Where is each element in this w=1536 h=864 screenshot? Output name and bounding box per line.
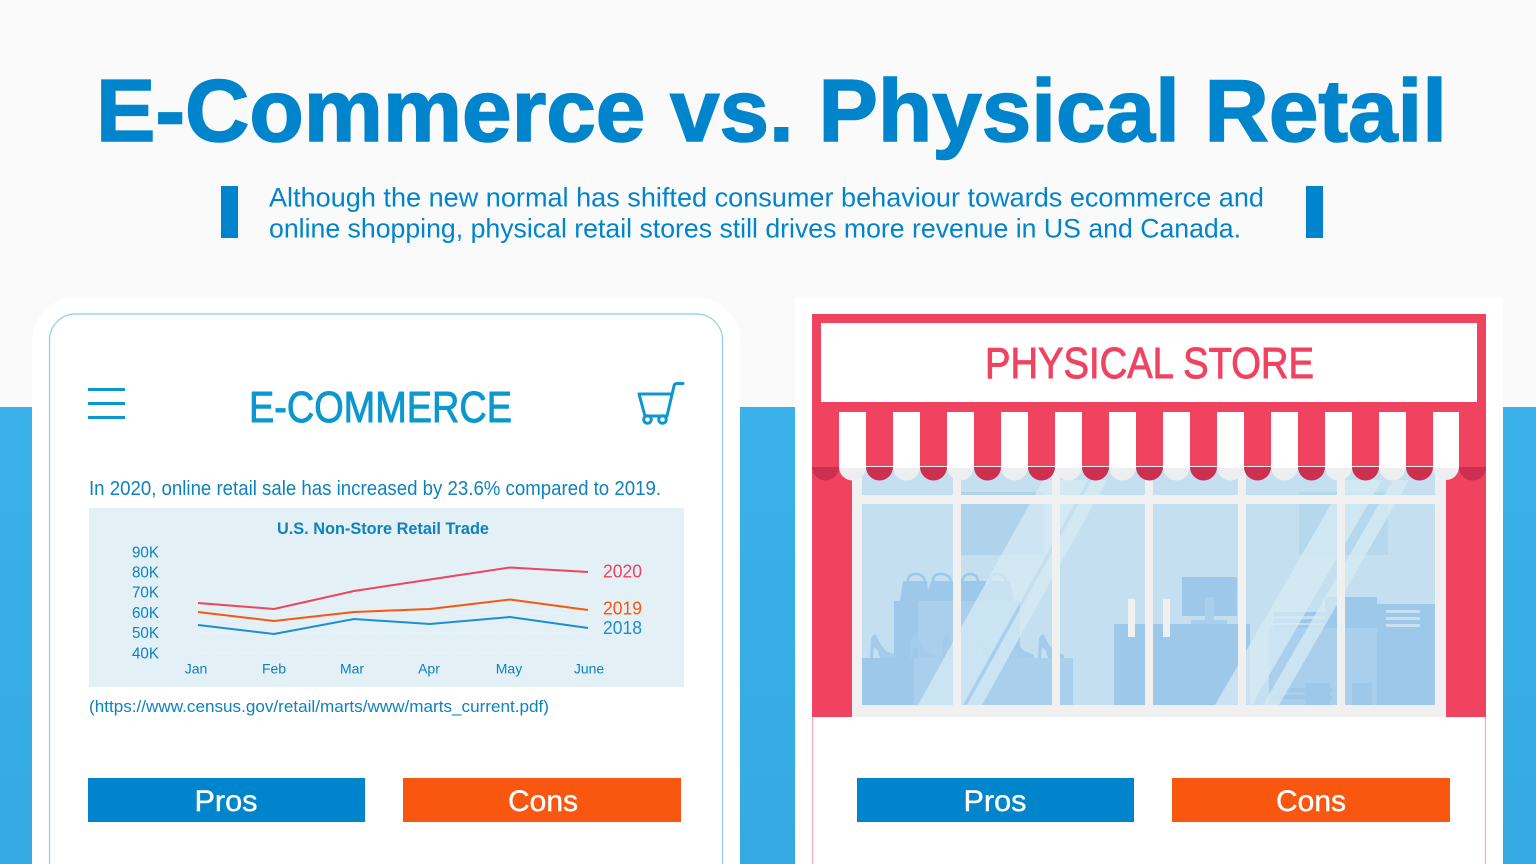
store sign frame [812, 314, 1486, 474]
glass reflections [918, 480, 1409, 705]
panel: e-commerce phone [32, 297, 740, 864]
pros button [88, 778, 365, 822]
y axis labels: 80K [132, 564, 160, 582]
window mullions [862, 468, 1435, 705]
cons button [403, 778, 681, 822]
line chart [89, 508, 684, 687]
glass [862, 468, 1435, 705]
phone screen outline [50, 314, 722, 864]
storefront outline [812, 717, 1486, 864]
window frame [852, 466, 1446, 717]
chart title: U.S. Non-Store Retail Trade [277, 519, 489, 538]
y axis labels: 50K [132, 625, 160, 642]
series 2020 [198, 568, 588, 609]
series 2019 [198, 600, 588, 621]
title: E-Commerce vs. Physical Retail [96, 61, 1447, 160]
statistic sentence: In 2020, online retail sale has increased by 23.6% compared to 2019. [89, 478, 661, 500]
display: bags and shoes [862, 492, 1073, 705]
y axis labels: 60K [132, 605, 160, 622]
subtitle text: Although the new normal has shifted consumer behaviour towards ecommerce and [269, 182, 1264, 212]
y axis labels: 90K [132, 544, 160, 562]
subtitle text: online shopping, physical retail stores still drives more revenue in US and Canada. [269, 214, 1241, 244]
y axis labels [132, 544, 160, 662]
pros button: Pros [964, 785, 1026, 818]
cons button [1172, 778, 1450, 822]
x axis labels: June [574, 660, 604, 676]
pros button: Pros [194, 785, 258, 818]
left accent bar [221, 186, 238, 238]
pros button [857, 778, 1134, 822]
line chart: 2018 [603, 618, 642, 638]
cons button: Cons [1276, 785, 1346, 818]
icon: shopping cart [639, 384, 683, 423]
x axis labels: Mar [340, 660, 364, 676]
subtitle block [221, 182, 1323, 244]
awning [812, 412, 1486, 481]
display: stacked books [1269, 492, 1435, 705]
store card [795, 297, 1503, 864]
y axis labels: 70K [132, 584, 160, 602]
x axis labels: Jan [185, 660, 207, 676]
x axis labels: Apr [418, 660, 440, 676]
right accent bar [1306, 186, 1323, 238]
door handles [1128, 599, 1170, 637]
icon: menu [88, 388, 125, 419]
line chart: 2019 [603, 598, 642, 618]
cons button: Cons [508, 785, 578, 818]
store sign [821, 323, 1477, 402]
store sign: PHYSICAL STORE [985, 339, 1314, 388]
panel: physical store [795, 297, 1503, 864]
series labels: 2020 [603, 562, 642, 582]
phone body [32, 297, 740, 864]
x axis labels [185, 660, 604, 676]
x axis labels: Feb [262, 660, 286, 676]
e-commerce heading: E-COMMERCE [249, 383, 512, 432]
side pillars [812, 468, 1486, 717]
x axis labels: May [496, 660, 522, 676]
y axis labels: 40K [132, 646, 160, 662]
source url: (https://www.census.gov/retail/marts/www/marts_current.pdf) [89, 697, 549, 716]
window [852, 466, 1446, 717]
display: counter and monitor [1114, 577, 1250, 705]
series 2018 [198, 617, 588, 634]
